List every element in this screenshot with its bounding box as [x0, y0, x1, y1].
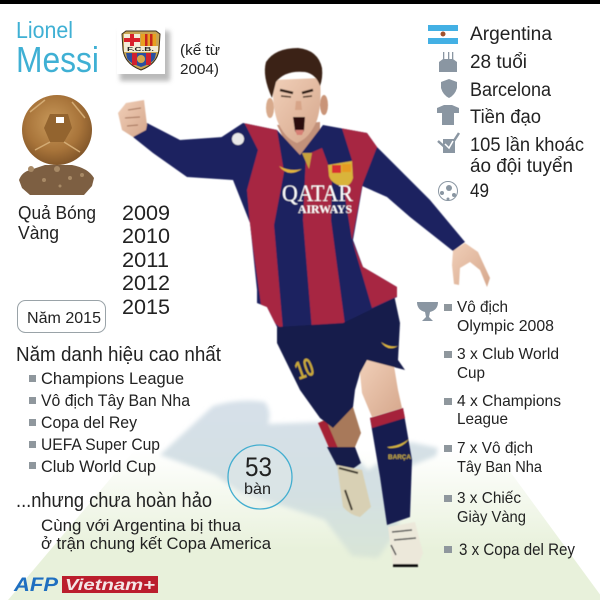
honour: La Liga: Tây Ban Nha: [457, 459, 542, 476]
crest caption: [180, 42, 220, 78]
player shirt: AIRWAYS: [298, 202, 352, 216]
year 2015 box: Năm 2015: [27, 310, 101, 327]
Golden Ball label: Quả Bóng: [18, 203, 96, 223]
player left arm and fist: [118, 100, 250, 180]
player head: [265, 48, 328, 143]
honour: Club World Cup: Cup: [457, 365, 485, 382]
icon: FC Barcelona crest: F.C.B.: [127, 47, 155, 53]
icon: FC Barcelona crest: [117, 26, 170, 81]
honour: Club World Cup: 3 x Club World: [457, 346, 559, 363]
Golden Ball years: 2015: [122, 296, 170, 319]
Golden Ball years: 2011: [122, 249, 169, 272]
Golden Ball years: 2010: [122, 225, 170, 248]
text: Copa America final: [41, 517, 272, 553]
heading: not perfect: ...nhưng chưa hoàn hảo: [16, 490, 212, 512]
list: five top titles: [29, 370, 191, 476]
player: Messi celebrating: [118, 48, 490, 567]
icon: golden ball trophy: [19, 95, 94, 195]
Golden Ball label: Vàng: [18, 223, 59, 243]
honour: Golden Boot: [457, 490, 526, 526]
list: career honours: [444, 299, 576, 559]
top black bar: [0, 0, 600, 4]
callout: 53 goals: bàn: [244, 481, 271, 498]
honour: Olympic: [457, 299, 554, 335]
honour: La Liga: [457, 440, 542, 476]
player right arm and hand: [360, 142, 490, 287]
honour: Champions League: 4 x Champions: [457, 393, 561, 410]
text: position: Tiền đạo: [470, 107, 541, 128]
icon: football: [438, 182, 458, 200]
Golden Ball years: 2009: [122, 202, 170, 225]
callout: 53 goals: [228, 445, 292, 509]
year 2015 box: [18, 300, 106, 332]
honour: Champions League: [457, 393, 561, 428]
icon: birthday cake: [439, 52, 457, 72]
honour: Champions League: League: [457, 411, 508, 428]
heading: top five titles: Năm danh hiệu cao nhất: [16, 344, 221, 366]
text: international goals: 49: [470, 181, 489, 202]
logo: AFP Vietnam+: Vietnam+: [65, 577, 155, 594]
list: five top titles: Champions League: [41, 370, 184, 388]
text: Argentina: Argentina: [470, 24, 552, 45]
text: caps: 105 lần khoác: [470, 135, 584, 156]
text: caps: [470, 135, 584, 177]
list: five top titles: Vô địch Tây Ban Nha: [41, 392, 191, 410]
crest caption: (kể từ: [180, 42, 220, 59]
icon: shirt: [437, 105, 459, 125]
logo: AFP Vietnam+: AFP: [13, 575, 58, 596]
honour: Golden Boot: 3 x Chiếc: [457, 490, 521, 507]
icon: trophy: [417, 302, 438, 321]
player neck: [277, 122, 320, 162]
icon: check mark: [438, 133, 459, 153]
honour: Olympic: Olympic 2008: [457, 318, 554, 335]
player right leg: [360, 360, 423, 567]
list: five top titles: UEFA Super Cup: [41, 436, 160, 454]
icon: Argentina flag: [428, 25, 458, 44]
player left leg: [318, 407, 371, 517]
green field background: [8, 440, 600, 600]
honour: Copa del Rey: 3 x Copa del Rey: [459, 541, 576, 559]
list: five top titles: Club World Cup: [41, 458, 156, 476]
honour: La Liga: 7 x Vô địch: [457, 440, 533, 457]
player shadow: [160, 401, 438, 558]
honour: Olympic: Vô địch: [457, 299, 508, 316]
player shirt: [221, 122, 398, 328]
player shorts: [277, 290, 405, 428]
player shorts: 10: [291, 353, 318, 386]
text: Copa America final: ở trận chung kết Copa America: [41, 535, 272, 553]
honour: Golden Boot: Giày Vàng: [457, 509, 526, 526]
player right leg: BARÇA: [388, 455, 412, 461]
title: Messi: [16, 39, 99, 80]
text: caps: áo đội tuyển: [470, 156, 573, 177]
list: five top titles: Copa del Rey: [41, 414, 138, 432]
callout: 53 goals: 53: [245, 452, 272, 482]
Golden Ball label: [18, 203, 96, 243]
text: Copa America final: Cùng với Argentina bị thua: [41, 517, 242, 535]
player shirt: QATAR: [282, 181, 354, 206]
crest caption: 2004): [180, 61, 219, 78]
title: [16, 17, 99, 80]
Golden Ball years: 2012: [122, 272, 170, 295]
icon: shield: [441, 79, 457, 98]
Golden Ball years: [122, 202, 170, 319]
text: club: Barcelona: [470, 80, 551, 101]
title: Lionel: [16, 17, 73, 43]
honour: Club World Cup: [457, 346, 559, 382]
text: age: 28 tuổi: [470, 52, 527, 73]
logo: AFP Vietnam+: [13, 575, 158, 596]
